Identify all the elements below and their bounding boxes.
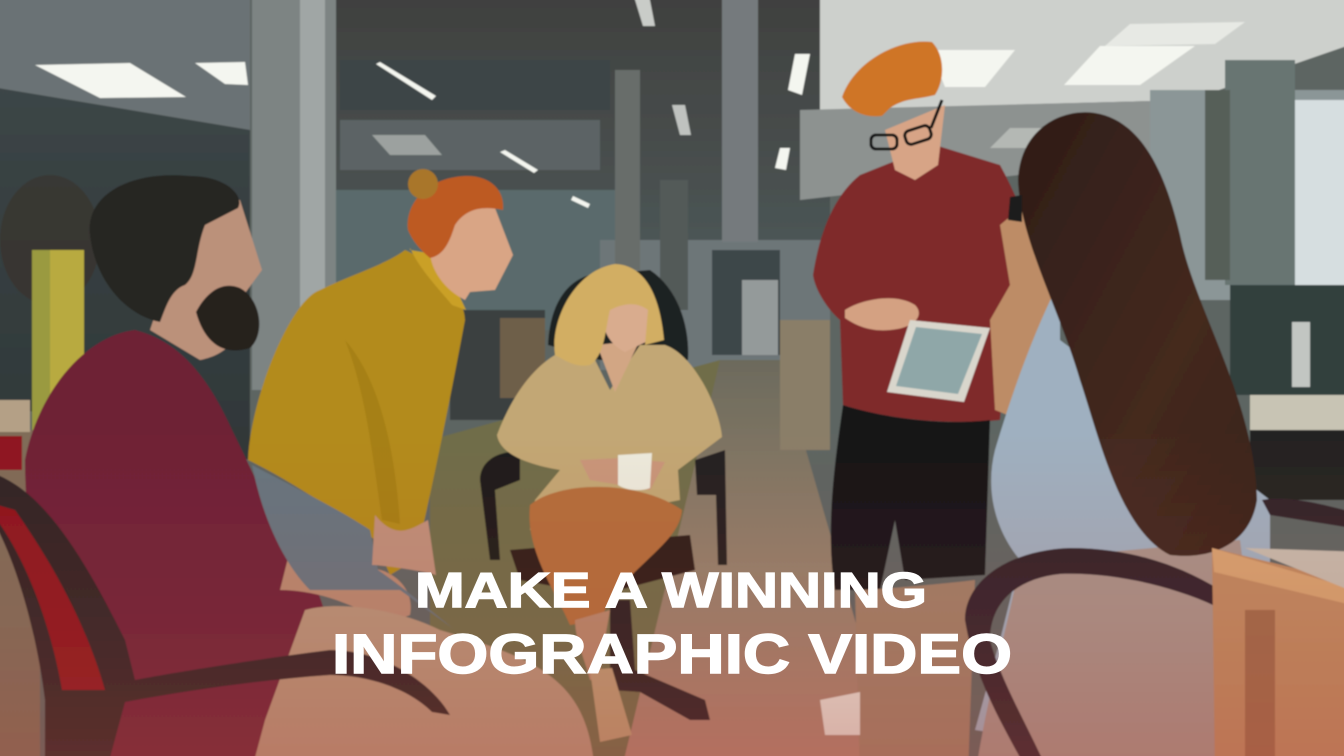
title line 1: MAKE A WINNING <box>415 564 927 618</box>
ceiling lights <box>35 0 1245 208</box>
office chair, centre <box>480 270 727 720</box>
title <box>332 564 1012 685</box>
title line 2: INFOGRAPHIC VIDEO <box>332 622 1012 685</box>
person: man with beard <box>25 175 595 756</box>
person: woman in yellow shirt <box>248 169 513 630</box>
chair and desk, right <box>965 499 1344 756</box>
red office chair, left <box>0 436 450 756</box>
person: standing man with glasses <box>813 42 1043 756</box>
person: woman with long hair <box>975 112 1270 756</box>
red colour fade overlay <box>0 430 1344 756</box>
person: seated blonde woman <box>497 264 722 742</box>
